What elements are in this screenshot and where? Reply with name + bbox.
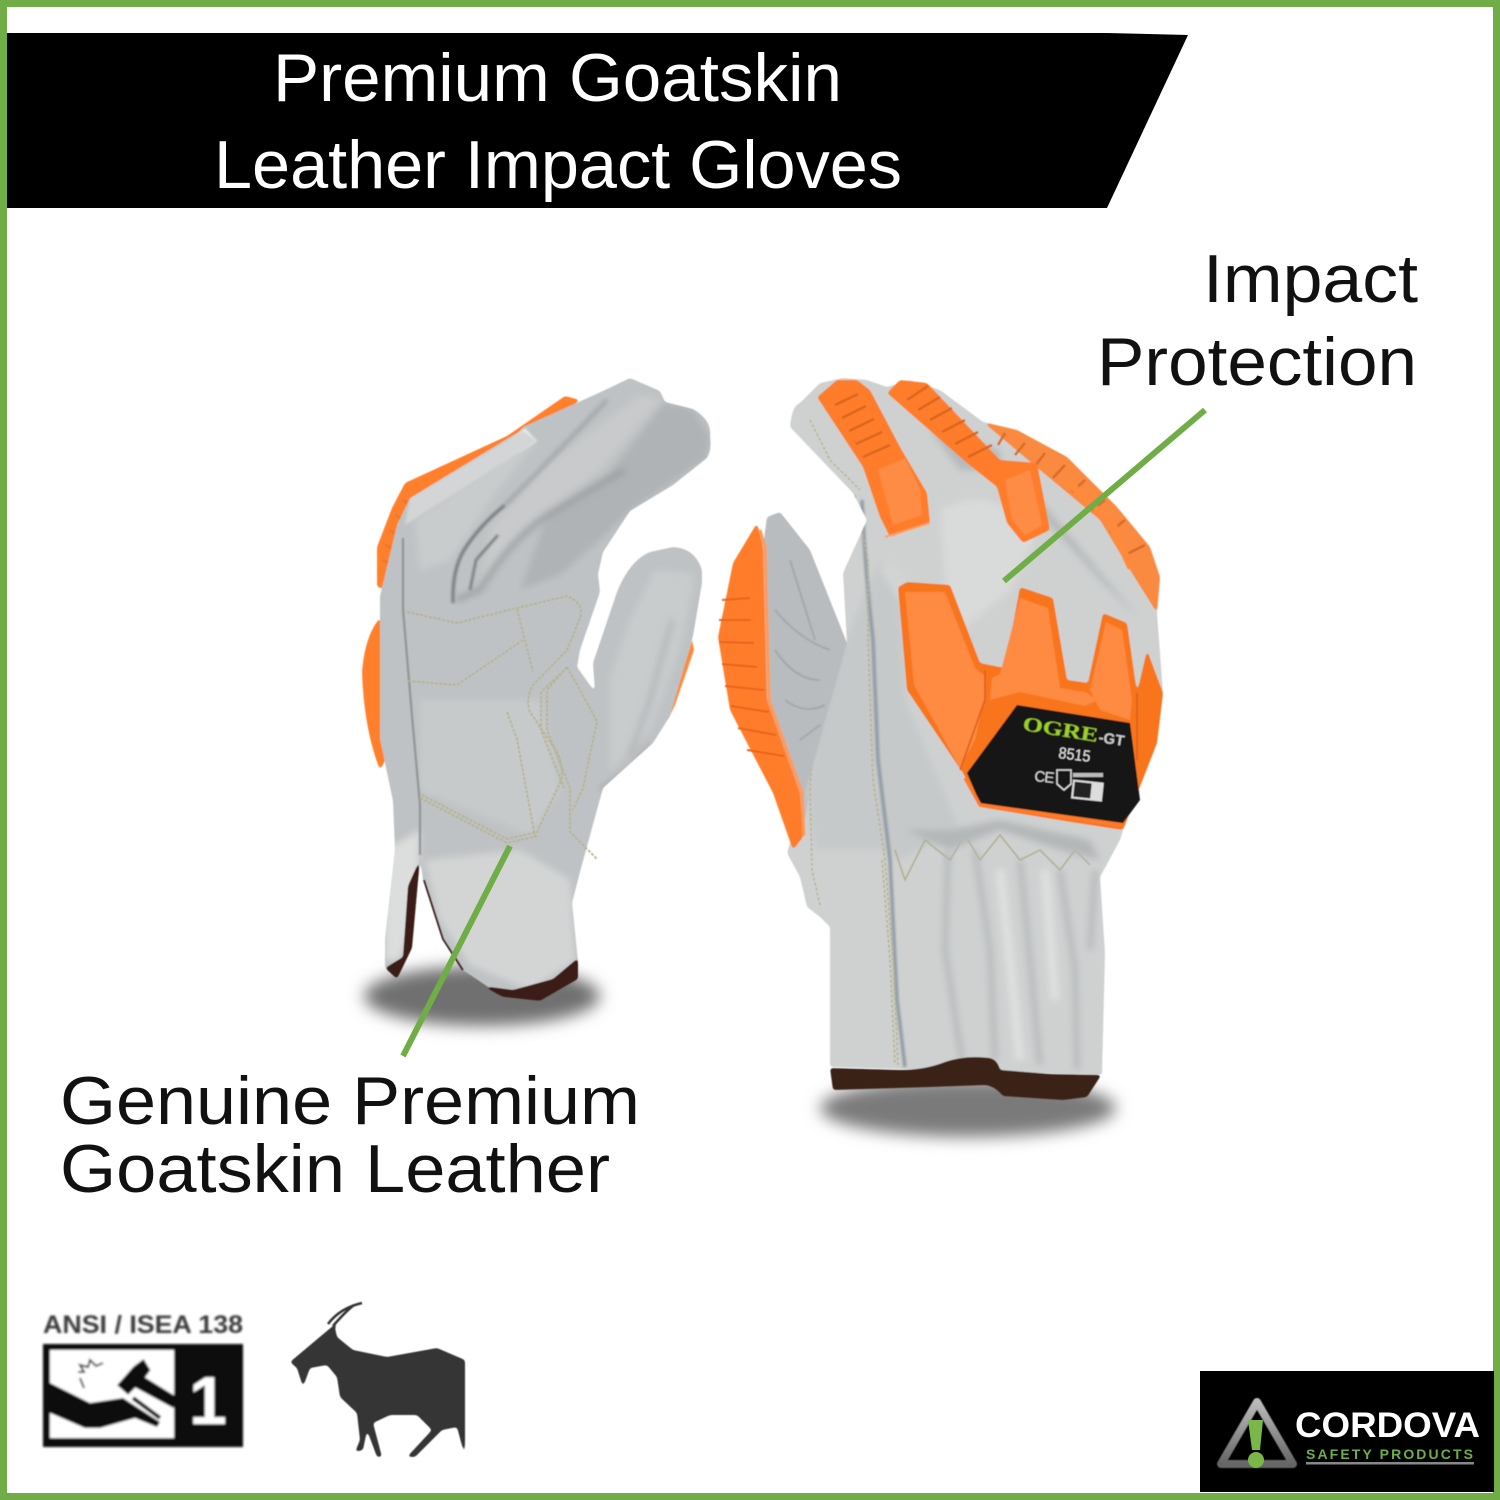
left glove palm patch stitching xyxy=(407,596,597,859)
leader line: impact protection xyxy=(1004,410,1205,581)
icon: ANSI/ISEA 138 impact level 1 xyxy=(43,1311,243,1447)
label certification marks xyxy=(1057,770,1104,802)
right glove knuckle guard xyxy=(898,582,1163,830)
shadow: right glove xyxy=(820,1079,1116,1137)
goat horns xyxy=(328,1303,362,1326)
icon: goat silhouette xyxy=(290,1303,465,1457)
logo exclamation mark xyxy=(1248,1420,1264,1468)
right glove thumb orange guard xyxy=(718,523,804,850)
label text: OGRE xyxy=(1021,713,1100,747)
right glove shading and cuff folds xyxy=(805,420,1140,1070)
right glove brown cuff binding xyxy=(830,1057,1102,1100)
left glove orange back guards xyxy=(362,396,694,770)
callout text: impact protection: Protection xyxy=(1097,324,1417,400)
right glove pinky finger guard xyxy=(983,422,1160,613)
callout text: genuine premium goatskin leather: Goatskin Leather xyxy=(60,1131,610,1207)
right glove thumb leather xyxy=(763,512,850,830)
label text: -GT xyxy=(1097,729,1126,750)
right glove black logo label xyxy=(967,705,1140,823)
title text xyxy=(214,40,902,203)
left glove shading and folds xyxy=(385,395,710,990)
icon hammer xyxy=(120,1362,173,1418)
title text: Leather Impact Gloves xyxy=(214,127,902,203)
title text: Premium Goatskin xyxy=(273,40,842,116)
brand logo: Cordova Safety Products xyxy=(1200,1371,1494,1492)
shadow: left glove xyxy=(364,966,600,1026)
label text: CE xyxy=(1034,768,1055,787)
leader line: goatskin leather xyxy=(403,846,510,1056)
label text xyxy=(1021,713,1126,787)
callout text: genuine premium goatskin leather: Genuine Premium xyxy=(60,1063,640,1139)
logo tagline: SAFETY PRODUCTS xyxy=(1306,1446,1473,1462)
callout text: impact protection xyxy=(1097,241,1418,400)
logo wordmark: CORDOVA xyxy=(1295,1406,1480,1445)
title banner xyxy=(7,33,1188,208)
icon caption: ANSI / ISEA 138 xyxy=(43,1311,243,1339)
icon frame xyxy=(43,1344,243,1447)
left glove leather body xyxy=(380,378,711,1001)
right glove leather body xyxy=(787,378,1163,1075)
left glove inner lining edge xyxy=(424,880,463,970)
right glove knuckle guard rim below label xyxy=(965,778,1123,826)
label text: 8515 xyxy=(1058,745,1091,766)
right glove (back view) xyxy=(718,378,1163,1100)
logo warning triangle xyxy=(1221,1402,1293,1464)
left glove brown binding xyxy=(385,859,578,1001)
left glove (palm view) xyxy=(362,378,711,1001)
right glove middle finger guard xyxy=(887,380,1050,543)
callout text: impact protection: Impact xyxy=(1203,241,1418,317)
icon hand xyxy=(48,1382,160,1428)
right glove index finger guard xyxy=(817,380,930,537)
right glove thumb wrinkles xyxy=(775,560,830,740)
icon level number: 1 xyxy=(189,1363,227,1439)
callout text: genuine premium goatskin leather xyxy=(60,1063,640,1207)
icon impact spark xyxy=(78,1360,103,1388)
